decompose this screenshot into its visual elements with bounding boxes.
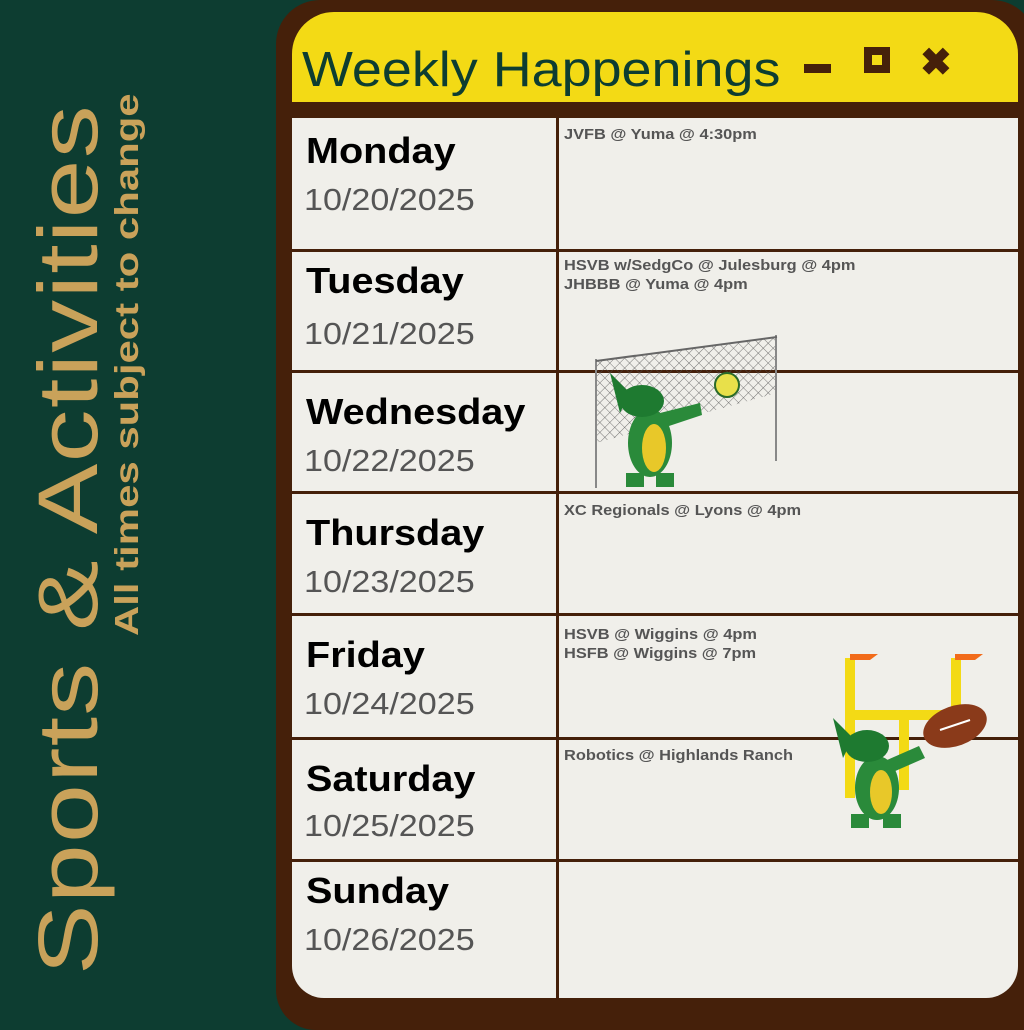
row: Saturday xyxy=(304,748,793,843)
icon: close: ✖ xyxy=(920,42,952,84)
window frame xyxy=(276,0,1024,1030)
sidebar title: Sports & Activities: Sports & Activities xyxy=(21,104,115,975)
row: Thursday: XC Regionals @ Lyons @ 4pm xyxy=(564,503,801,519)
row: Sunday: 10/26/2025 xyxy=(304,922,475,957)
icon: maximize xyxy=(864,47,890,73)
row: Monday xyxy=(304,127,757,217)
row: Monday: JVFB @ Yuma @ 4:30pm xyxy=(564,127,757,143)
row: Tuesday: HSVB w/SedgCo @ Julesburg @ 4pm xyxy=(564,258,855,274)
illustration: football dragon xyxy=(833,654,987,828)
icon: minimize xyxy=(804,64,831,73)
row: Sunday xyxy=(304,870,475,957)
row: Tuesday xyxy=(304,258,855,351)
row: Sunday: Sunday xyxy=(306,870,449,911)
row: Thursday xyxy=(304,503,801,599)
row: Friday: 10/24/2025 xyxy=(304,686,475,721)
row: Thursday: Thursday xyxy=(306,512,484,553)
row: Saturday: Robotics @ Highlands Ranch xyxy=(564,748,793,764)
row: Friday xyxy=(304,627,757,721)
header bar xyxy=(292,12,1018,102)
row: Friday: HSFB @ Wiggins @ 7pm xyxy=(564,646,756,662)
row: Friday: Friday xyxy=(306,634,425,675)
row: Wednesday: 10/22/2025 xyxy=(304,443,475,478)
row: Wednesday xyxy=(304,391,526,478)
header title: Weekly Happenings xyxy=(302,43,780,97)
row: Tuesday: JHBBB @ Yuma @ 4pm xyxy=(564,277,748,293)
row: Tuesday: 10/21/2025 xyxy=(304,316,475,351)
illustration: volleyball dragon xyxy=(595,335,778,488)
row: Monday: 10/20/2025 xyxy=(304,182,475,217)
row: Saturday: 10/25/2025 xyxy=(304,808,475,843)
row: Tuesday: Tuesday xyxy=(306,260,464,301)
row: Saturday: Saturday xyxy=(306,758,475,799)
row: Friday: HSVB @ Wiggins @ 4pm xyxy=(564,627,757,643)
sidebar subtitle: All times subject to change xyxy=(108,93,145,636)
row: Thursday: 10/23/2025 xyxy=(304,564,475,599)
row: Monday: Monday xyxy=(306,130,456,171)
schedule table xyxy=(292,118,1018,998)
row: Wednesday: Wednesday xyxy=(306,391,525,432)
